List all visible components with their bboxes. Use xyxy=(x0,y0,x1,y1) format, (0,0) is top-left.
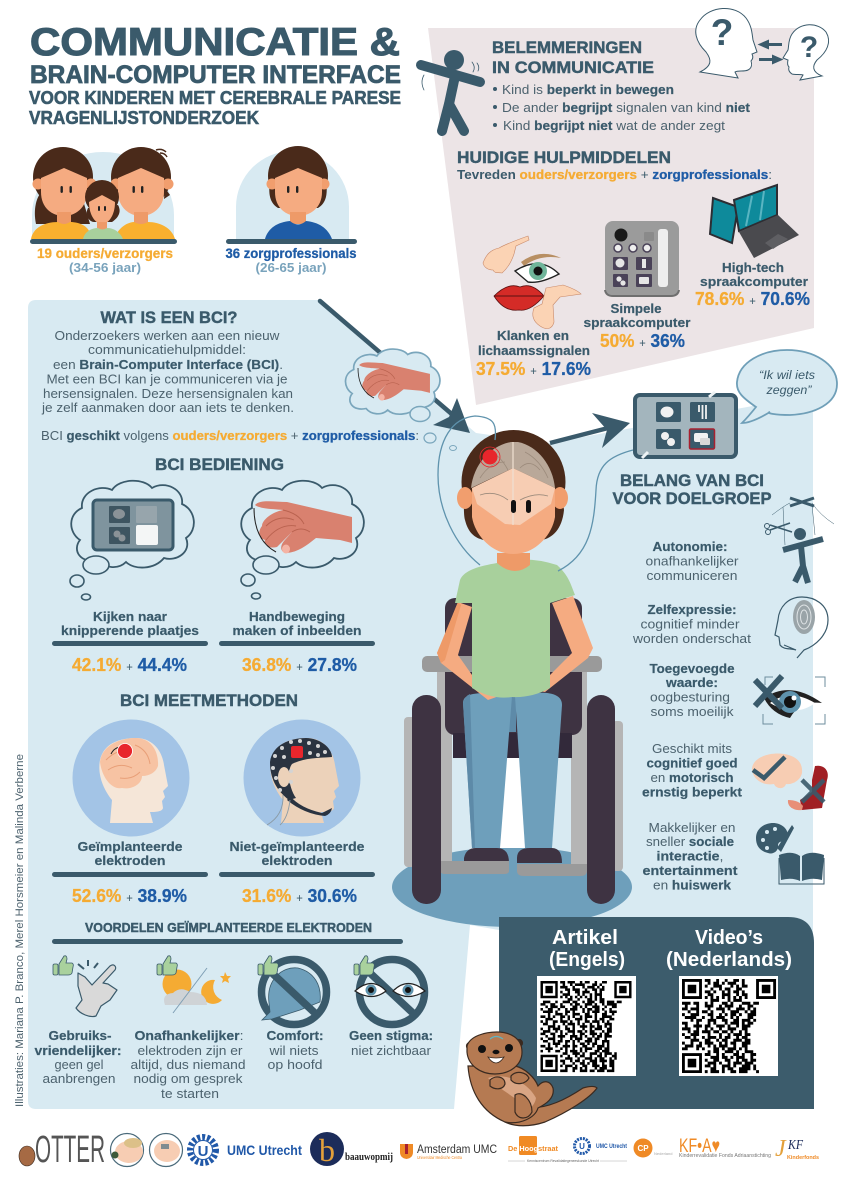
text: comfort: Comfort: xyxy=(266,1028,324,1043)
title: COMMUNICATIE & xyxy=(30,21,400,64)
list: belemmeringen: De ander begrijpt signalen van kind niet xyxy=(502,100,751,115)
label: simpele spraakcomputer: spraakcomputer xyxy=(584,315,690,330)
logo: otter: OTTER xyxy=(35,1129,105,1171)
label: handbeweging: maken of inbeelden xyxy=(232,623,362,638)
panel: links xyxy=(499,917,814,1109)
heading: bci meetmethoden: BCI MEETMETHODEN xyxy=(120,691,298,710)
callout: ik wil iets zeggen: zeggen” xyxy=(765,383,813,397)
subheading: tevreden: Tevreden ouders/verzorgers + zorgprofessionals : xyxy=(457,167,772,182)
label: zorgprofessionals xyxy=(226,245,357,275)
text: makkelijker: Makkelijker en xyxy=(648,820,736,835)
text: toegevoegde waarde xyxy=(650,661,734,719)
title: BRAIN-COMPUTER INTERFACE xyxy=(30,61,401,89)
logo: kfa: KF•A♥ xyxy=(679,1136,720,1157)
logo: jkf kinderfonds: Kinderfonds xyxy=(787,1155,819,1161)
text: geschikt mits xyxy=(642,741,743,800)
label: niet-geïmplanteerde xyxy=(219,839,375,906)
label: ouders xyxy=(37,245,173,275)
label: niet-geïmplanteerde: Niet-geïmplanteerde xyxy=(230,839,364,854)
icon: no visible eyes xyxy=(354,956,425,1024)
text: onafhankelijker: altijd, dus niemand xyxy=(130,1057,246,1072)
label: kijken: knipperende plaatjes xyxy=(61,623,199,638)
logo: umc utrecht xyxy=(190,1137,302,1163)
logo: project circles xyxy=(110,1134,182,1166)
label: kijken: 42.1% + 44.4% xyxy=(72,654,187,675)
label: handbeweging: 36.8% + 27.8% xyxy=(242,654,357,675)
heading: videos: (Nederlands) xyxy=(666,949,792,971)
label: ouders: 19 ouders/verzorgers xyxy=(37,245,173,261)
text: zelfexpressie: Zelfexpressie: xyxy=(648,602,736,617)
heading: belemmeringen: IN COMMUNICATIE xyxy=(492,59,654,77)
logo: jkf kinderfonds: KF xyxy=(787,1138,803,1153)
text: autonomie xyxy=(646,539,739,583)
callout: ik wil iets zeggen xyxy=(737,350,837,423)
icon: thought cloud with hand xyxy=(345,349,456,450)
icon: tablet and laptop xyxy=(710,185,799,258)
icon: brain check and arm cross xyxy=(752,754,828,810)
label: geïmplanteerde: 52.6% + 38.9% xyxy=(72,885,187,906)
title: VRAGENLIJSTONDERZOEK xyxy=(29,108,259,128)
title xyxy=(29,21,401,128)
heading: artikel xyxy=(549,927,625,971)
text: autonomie: Autonomie: xyxy=(652,539,728,554)
text: geschikt mits: cognitief goed xyxy=(646,756,738,770)
text: onafhankelijker: nodig om gesprek xyxy=(134,1071,243,1086)
logo: amsterdam umc: Universitair Medische Centra xyxy=(417,1155,462,1160)
label: klanken en lichaamssignalen: lichaamssignalen xyxy=(478,343,590,358)
label: niet-geïmplanteerde: elektroden xyxy=(262,853,333,868)
logo: umc utrecht small: U xyxy=(579,1142,585,1151)
illustration: otter xyxy=(466,1032,597,1126)
logo: baauwopmij: baauwopmij xyxy=(345,1152,393,1163)
arrow: uitleg naar hoofd xyxy=(320,301,470,433)
text: makkelijker: entertainment xyxy=(642,863,738,878)
text: bci uitleg: een Brain-Computer Interface (BCI) . xyxy=(53,357,283,372)
text: bci uitleg xyxy=(41,328,294,415)
text: makkelijker xyxy=(642,820,738,892)
label: simpele spraakcomputer: Simpele xyxy=(610,301,662,316)
text: bci uitleg: communicatiehulpmiddel: xyxy=(88,342,246,357)
text: bci uitleg: je zelf aanmaken door aan iets te denken. xyxy=(41,400,294,415)
icon: two heads with question marks: ? xyxy=(711,12,733,53)
label: kijken xyxy=(52,609,208,675)
label: simpele spraakcomputer: 50% + 36% xyxy=(600,330,685,351)
text: bci uitleg: Met een BCI kan je communiceren via je xyxy=(46,372,288,386)
logo: kfa xyxy=(679,1136,771,1159)
label: niet-geïmplanteerde: 31.6% + 30.6% xyxy=(242,885,357,906)
logo: umc utrecht: UMC Utrecht xyxy=(227,1142,302,1158)
title: VOOR KINDEREN MET CEREBRALE PARESE xyxy=(29,88,401,108)
label: geïmplanteerde: elektroden xyxy=(94,853,166,868)
logo: jkf kinderfonds: J xyxy=(775,1136,787,1162)
text: geschikt mits: en motorisch xyxy=(650,770,734,785)
heading: videos xyxy=(666,927,792,971)
label: klanken en lichaamssignalen xyxy=(476,328,591,379)
logo: amsterdam umc xyxy=(400,1144,497,1160)
logo: amsterdam umc: Amsterdam UMC xyxy=(417,1144,497,1156)
logo: baauwopmij: b xyxy=(319,1132,335,1168)
qr code: artikel xyxy=(537,976,636,1076)
text: geen stigma xyxy=(349,1028,433,1058)
label: handbeweging xyxy=(219,609,375,675)
text: makkelijker: sneller sociale xyxy=(646,834,734,849)
arrow: naar tablet xyxy=(550,413,630,448)
text: makkelijker: en huiswerk xyxy=(653,878,732,892)
heading: wat is een bci: WAT IS EEN BCI? xyxy=(100,308,238,327)
icon: implanted head xyxy=(72,720,190,836)
list: belemmeringen: Kind is beperkt in bewegen xyxy=(502,82,674,97)
text: zelfexpressie xyxy=(632,602,751,646)
icon: finger snap xyxy=(53,956,117,1017)
panel: belemmeringen en hulpmiddelen xyxy=(421,8,829,405)
heading: artikel: (Engels) xyxy=(549,949,625,971)
label: simpele spraakcomputer xyxy=(584,301,690,351)
heading: voordelen: VOORDELEN GEÏMPLANTEERDE ELEKTRODEN xyxy=(85,920,372,935)
logo: baauwopmij xyxy=(310,1132,393,1168)
label: high-tech spraakcomputer xyxy=(695,260,810,309)
logo: de hoogstraat: Kenniscentrum Revalidatiegeneeskunde Utrecht xyxy=(527,1159,599,1163)
logo: umc utrecht small xyxy=(574,1138,627,1154)
icon: non-implanted head with electrode cap xyxy=(244,720,360,836)
label: zorgprofessionals: (26-65 jaar) xyxy=(256,260,326,275)
heading: voordelen xyxy=(52,920,403,944)
text: onafhankelijker: elektroden zijn er xyxy=(138,1043,243,1058)
text: onafhankelijker: te starten xyxy=(161,1086,219,1101)
label: klanken en lichaamssignalen: Klanken en xyxy=(497,328,569,343)
credit: illustraties: Illustraties: Mariana P. Branco, Merel Horsmeier en Malinda Verberne xyxy=(14,754,26,1107)
text: onafhankelijker: Onafhankelijker : xyxy=(134,1028,244,1043)
text: gebruiksvriendelijker: Gebruiks- xyxy=(48,1028,112,1043)
text: onafhankelijker xyxy=(130,1028,246,1101)
icon: two heads with question marks: ? xyxy=(800,31,818,64)
text: autonomie: onafhankelijker xyxy=(646,554,739,568)
logo: umc utrecht small: UMC Utrecht xyxy=(596,1144,627,1150)
icon: day and night xyxy=(157,956,231,1013)
text: gebruiksvriendelijker: vriendelijker: xyxy=(34,1043,122,1058)
logo: de hoogstraat: De Hoogstraat xyxy=(508,1144,558,1153)
text: gebruiksvriendelijker xyxy=(34,1028,122,1086)
text: toegevoegde waarde: waarde: xyxy=(665,675,718,690)
logo: jkf kinderfonds xyxy=(775,1136,819,1162)
text: comfort: op hoofd xyxy=(268,1057,322,1072)
label: high-tech spraakcomputer: 78.6% + 70.6% xyxy=(695,288,810,309)
icon: two heads with question marks xyxy=(696,8,829,80)
text: bci uitleg: Onderzoekers werken aan een nieuw xyxy=(54,328,280,343)
illustration: child in wheelchair xyxy=(392,430,632,927)
label: high-tech spraakcomputer: spraakcomputer xyxy=(700,274,808,289)
label: kijken: Kijken naar xyxy=(93,609,167,624)
icon: simple speech device xyxy=(605,221,679,296)
callout: ik wil iets zeggen: “Ik wil iets xyxy=(759,368,815,382)
text: comfort xyxy=(266,1028,324,1072)
wire: head to thought and tablet xyxy=(438,416,633,571)
text: comfort: wil niets xyxy=(268,1043,319,1058)
icon: cloud with hand xyxy=(241,481,364,599)
label: ouders: (34-56 jaar) xyxy=(69,260,141,275)
list: belemmeringen xyxy=(493,82,751,133)
icon: care professional xyxy=(226,146,357,244)
logo: kfa: Kinderrevalidatie Fonds Adriaanstichting xyxy=(679,1153,771,1159)
logo: cp nederland: Nederland xyxy=(654,1151,672,1156)
text: toegevoegde waarde: oogbesturing xyxy=(650,690,730,704)
logo: cp nederland xyxy=(634,1138,672,1158)
icon: tablet with choices xyxy=(635,392,736,458)
text: toegevoegde waarde: Toegevoegde xyxy=(650,661,734,676)
heading: belemmeringen: BELEMMERINGEN xyxy=(492,39,642,57)
list: belemmeringen: Kind begrijpt niet wat de ander zegt xyxy=(503,118,725,133)
logo: umc utrecht: U xyxy=(198,1143,208,1160)
label: zorgprofessionals: 36 zorgprofessionals xyxy=(226,245,357,261)
icon: sounds and body signals xyxy=(483,236,581,329)
logo: cp nederland: CP xyxy=(637,1144,649,1153)
heading: videos: Video’s xyxy=(695,927,763,949)
logo: de hoogstraat xyxy=(508,1136,627,1163)
text: gebruiksvriendelijker: aanbrengen xyxy=(42,1071,116,1086)
heading: artikel: Artikel xyxy=(552,927,618,949)
heading: belang van bci: BELANG VAN BCI xyxy=(620,471,764,490)
heading: belang van bci xyxy=(612,471,772,508)
panel: blue background xyxy=(28,300,813,1109)
text: gebruiksvriendelijker: geen gel xyxy=(54,1057,104,1072)
text: bci uitleg: hersensignalen. Deze hersensignalen kan xyxy=(43,386,293,401)
text: toegevoegde waarde: soms moeilijk xyxy=(650,704,734,719)
label: high-tech spraakcomputer: High-tech xyxy=(722,260,784,275)
text: zelfexpressie: cognitief minder xyxy=(640,616,740,632)
heading: huidige hulpmiddelen: HUIDIGE HULPMIDDELEN xyxy=(457,148,671,167)
label: klanken en lichaamssignalen: 37.5% + 17.6% xyxy=(476,358,591,379)
logo: otter xyxy=(19,1129,105,1171)
heading: belang van bci: VOOR DOELGROEP xyxy=(612,489,772,508)
text: makkelijker: interactie , xyxy=(656,848,724,864)
icon: no cap xyxy=(258,956,326,1024)
text: geen stigma: niet zichtbaar xyxy=(351,1043,432,1058)
qr code: videos xyxy=(679,976,778,1076)
label: handbeweging: Handbeweging xyxy=(249,609,345,624)
icon: head with fingerprint xyxy=(775,597,828,658)
text: geschikt mits: Geschikt mits xyxy=(652,741,733,756)
icon: cloud with flickering tablet xyxy=(70,481,194,600)
icon: family xyxy=(30,147,177,244)
icon: eye with cross xyxy=(755,676,825,724)
heading: bci bediening: BCI BEDIENING xyxy=(155,455,284,474)
text: bci geschikt: BCI geschikt volgens ouders/verzorgers + zorgprofessionals: xyxy=(41,428,419,443)
icon: palette and book xyxy=(756,823,824,884)
text: zelfexpressie: worden onderschat xyxy=(632,631,751,646)
icon: moving child xyxy=(421,50,480,131)
text: geen stigma: Geen stigma: xyxy=(349,1028,433,1043)
label: geïmplanteerde: Geïmplanteerde xyxy=(78,839,182,854)
label: geïmplanteerde xyxy=(52,839,208,906)
icon: puppet with cut strings xyxy=(764,498,834,583)
text: geschikt mits: ernstig beperkt xyxy=(642,784,743,800)
text: autonomie: communiceren xyxy=(646,568,738,583)
heading: belemmeringen xyxy=(492,39,654,77)
